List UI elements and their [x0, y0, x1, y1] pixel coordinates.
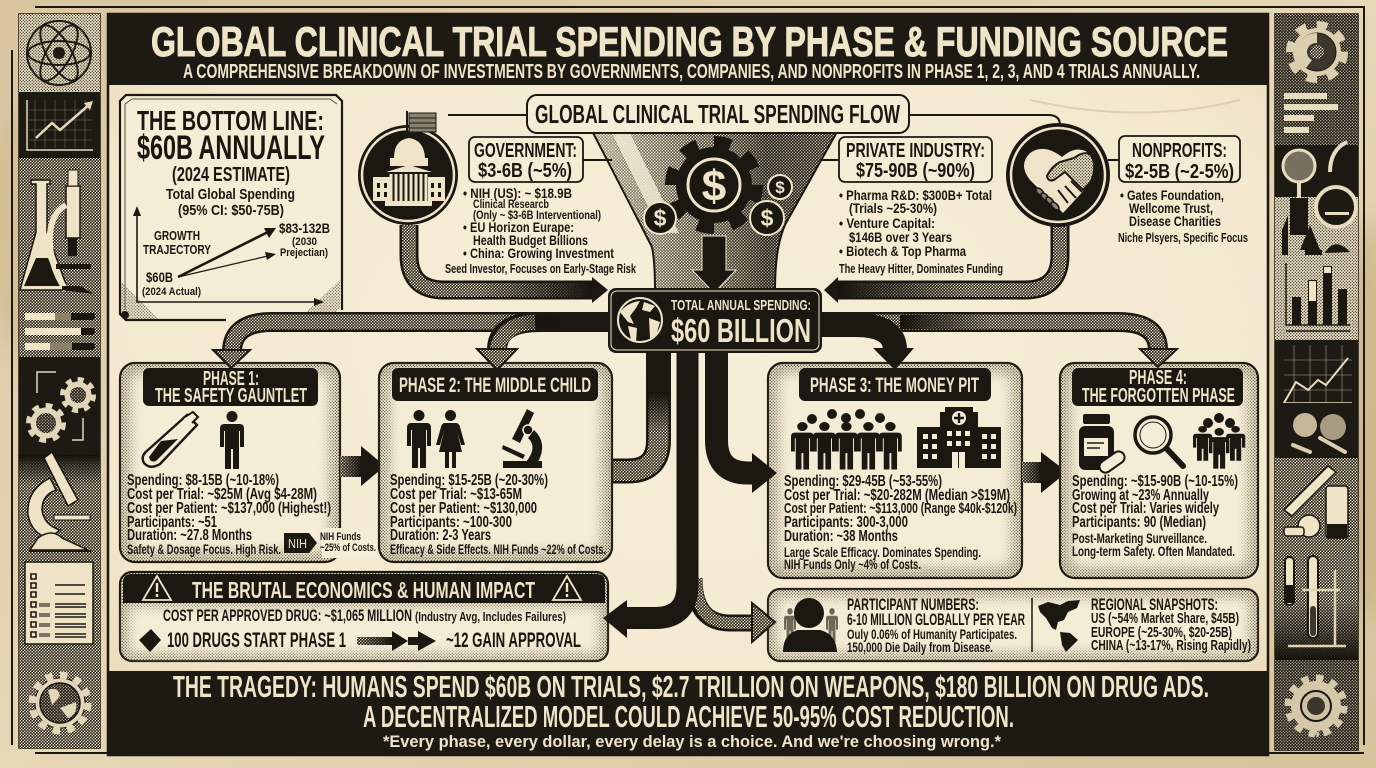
- NIH callout phase 1: ~25% of Costs.: [320, 542, 376, 554]
- icon: bottle and pills: [1275, 458, 1358, 543]
- panel: bottom line: (95% CI: $50-75B): [178, 202, 284, 219]
- heading: nonprofits: NONPROFITS:: [1132, 140, 1227, 162]
- text: phase 1 stats: Duration: ~27.8 Months: [127, 527, 252, 544]
- text: government details: Seed Investor, Focuses on Early-Stage Risk: [445, 262, 636, 276]
- heading: government: [469, 137, 583, 182]
- growth trajectory chart: (2030: [292, 236, 317, 248]
- growth trajectory chart: TRAJECTORY: [143, 242, 211, 257]
- icon: coins: [644, 175, 792, 235]
- arrow: phase 1 to 2: [340, 446, 385, 486]
- text: phase 3 stats: [784, 473, 1017, 572]
- panel: participants and regions: [768, 589, 1258, 661]
- text: phase 3 stats: Spending: $29-45B (~53-55%): [784, 473, 942, 490]
- total annual spending box: [608, 288, 822, 353]
- heading: government: $3-6B (~5%): [478, 160, 572, 182]
- growth trajectory chart: GROWTH: [154, 228, 200, 243]
- text: phase 4 stats: [1072, 473, 1238, 559]
- text: private industry details: (Trials ~25-30%): [849, 200, 937, 216]
- text: nonprofit details: Niche Plsyers, Specific Focus: [1118, 231, 1248, 245]
- phase 2 header: [392, 368, 598, 401]
- text: private industry details: The Heavy Hitter, Dominates Funding: [839, 262, 1003, 276]
- panel: brutal economics: [120, 572, 608, 661]
- icon: coins: $: [654, 205, 667, 231]
- text: government details: Clinical Researcb: [473, 199, 549, 211]
- text: regional snapshots: CHINA (~13-17%, Rising Rapidly): [1091, 637, 1251, 654]
- panel: phase 1: [120, 363, 340, 562]
- arrow: attrition: [357, 631, 436, 651]
- arrow: to phase 2: [477, 315, 610, 370]
- phase 4 header: PHASE 4:: [1129, 367, 1187, 389]
- bottom banner: *Every phase, every dollar, every delay is a choice. And we're choosing wrong.*: [383, 732, 1001, 751]
- source: nonprofits: [824, 123, 1248, 303]
- heading: private industry: $75-90B (~90%): [856, 160, 975, 182]
- text: phase 4 stats: Cost per Trial: Varies widely: [1072, 500, 1219, 517]
- icon: gear: [1275, 660, 1358, 750]
- total annual spending box: TOTAL ANNUAL SPENDING:: [671, 297, 811, 314]
- text: phase 3 stats: Duration: ~38 Months: [784, 528, 898, 545]
- icon: flask and syringe: [19, 158, 100, 294]
- text: phase 3 stats: Cost per Trial: ~$20-282M (Median >$19M): [784, 487, 1010, 504]
- text: phase 2 stats: [390, 472, 606, 557]
- icon: americas map: [1038, 600, 1080, 652]
- text: participant numbers: 6-10 MILLION GLOBALLY PER YEAR: [847, 610, 1025, 629]
- icon: line chart: [1275, 340, 1358, 403]
- icon: pill bottle: [1079, 414, 1127, 475]
- arrow: to phase 1: [213, 322, 610, 368]
- NIH callout phase 1: NIH Funds: [320, 531, 361, 543]
- icon: hospital: [917, 407, 1001, 468]
- icon: pie gear: [1275, 14, 1358, 145]
- text: phase 1 stats: Spending: $8-15B (~10-18%): [127, 472, 279, 489]
- text: participant numbers: PARTICIPANT NUMBERS:: [847, 595, 979, 614]
- phase 4 header: THE FORGOTTEN PHASE: [1082, 385, 1235, 407]
- icon: globe: [618, 298, 662, 342]
- text: phase 2 stats: Duration: 2-3 Years: [390, 527, 491, 544]
- text: participant numbers: [847, 595, 1025, 655]
- text: phase 4 stats: Long-term Safety. Often Mandated.: [1072, 543, 1235, 559]
- icon: globe gear: [19, 652, 100, 748]
- heading: private industry: PRIVATE INDUSTRY:: [846, 140, 985, 162]
- text: nonprofit details: Wellcome Trust,: [1129, 200, 1213, 216]
- phase 1 header: [143, 368, 318, 407]
- icon: worn magnifiers: [1275, 403, 1358, 458]
- text: government details: • NIH (US): ~ $18.9B: [463, 185, 572, 201]
- connector lines to flow title: [448, 115, 1060, 125]
- text: nonprofit details: • Gates Foundation,: [1120, 187, 1224, 203]
- text: government details: (Only ~ $3-6B Interventional): [473, 210, 601, 222]
- icon: group: [1193, 413, 1245, 469]
- icon: gears: [19, 357, 100, 455]
- icon: test tube on stand: [1275, 543, 1358, 660]
- bottom banner: [108, 669, 1268, 755]
- phase 2 header: PHASE 2: THE MIDDLE CHILD: [399, 374, 591, 397]
- heading: nonprofits: [1119, 136, 1240, 183]
- text: phase 1 stats: Participants: ~51: [127, 514, 217, 531]
- text: private industry details: • Pharma R&D: $300B+ Total: [839, 187, 992, 203]
- panel: bottom line: Total Global Spending: [166, 186, 295, 203]
- arrow: to phase 4: [822, 315, 1177, 367]
- panel: bottom line: [120, 95, 342, 320]
- text: phase 2 stats: Participants: ~100-300: [390, 514, 512, 531]
- arrow: stem to participants: [694, 578, 775, 642]
- text: phase 4 stats: Participants: 90 (Median): [1072, 514, 1206, 531]
- icon: microscope: [19, 452, 100, 560]
- text: phase 3 stats: Large Scale Efficacy. Dominates Spending.: [784, 544, 981, 560]
- panel: bottom line: THE BOTTOM LINE:: [137, 105, 324, 136]
- text: regional snapshots: US (~54% Market Share, $45B): [1091, 610, 1239, 627]
- text: phase 3 stats: Participants: 300-3,000: [784, 514, 908, 531]
- text: phase 3 stats: NIH Funds Only ~4% of Costs.: [784, 556, 921, 572]
- text: phase 4 stats: Post-Marketing Surveillance.: [1072, 530, 1207, 546]
- total annual spending box: $60 BILLION: [671, 312, 811, 349]
- right icon sidebar: [1275, 14, 1358, 750]
- text: participant numbers: 150,000 Die Daily from Disease.: [847, 639, 993, 655]
- panel: brutal economics: COST PER APPROVED DRUG: ~$1,065 MILLION: [163, 606, 412, 625]
- arrow: stem to brutal economics: [603, 350, 688, 638]
- icon: coins: $: [761, 205, 774, 231]
- arrow: government pipe: [409, 225, 608, 303]
- icon: crowd: [791, 409, 902, 470]
- text: phase 1 stats: Cost per Trial: ~$25M (Avg $4-28M): [127, 486, 317, 503]
- text: phase 4 stats: Spending: ~$15-90B (~10-15%): [1072, 473, 1238, 490]
- icon: bar chart: [1275, 262, 1358, 340]
- arrow: phase 3 to 4: [1022, 452, 1067, 493]
- panel: bottom line: (2024 ESTIMATE): [172, 164, 290, 186]
- text: government details: [445, 185, 636, 276]
- icon: warning triangles: [143, 576, 581, 600]
- text: private industry details: • Biotech & Top Pharma: [839, 243, 966, 259]
- icon: checklist: [19, 558, 100, 652]
- brutal economics header: [123, 574, 605, 603]
- growth trajectory chart: $83-132B: [279, 220, 330, 236]
- growth trajectory chart: (2024 Actual): [142, 286, 201, 298]
- flow title: [527, 95, 909, 133]
- panel: phase 3: [768, 363, 1022, 578]
- panel: brutal economics: (Industry Avg, Includes Failures): [415, 609, 566, 624]
- phase 3 header: PHASE 3: THE MONEY PIT: [810, 374, 979, 397]
- panel: phase 2: [379, 363, 612, 562]
- phase 4 header: [1072, 367, 1243, 407]
- source: government: [358, 111, 636, 303]
- source: private industry: [839, 137, 1003, 276]
- panel: brutal economics: ~12 GAIN APPROVAL: [446, 629, 581, 652]
- phase 1 header: THE SAFETY GAUNTLET: [155, 385, 307, 407]
- NIH callout phase 1: NIH: [288, 537, 307, 551]
- text: phase 3 stats: Cost per Patient: ~$113,000 (Range $40k-$120k): [784, 500, 1017, 517]
- panel: brutal economics: 100 DRUGS START PHASE 1: [167, 629, 346, 652]
- icon: microscope: [502, 409, 542, 468]
- left icon sidebar: [19, 14, 100, 748]
- text: nonprofit details: Disease Charities: [1129, 213, 1221, 229]
- text: government details: • China: Growing Investment: [463, 245, 614, 261]
- text: private industry details: $146B over 3 Years: [849, 229, 952, 245]
- text: phase 2 stats: Cost per Patient: ~$130,000: [390, 500, 537, 517]
- text: participant numbers: Ouly 0.06% of Humanity Participates.: [847, 626, 1017, 642]
- arrow: nonprofit pipe: [824, 225, 1060, 303]
- funnel: [588, 123, 842, 290]
- heading: nonprofits: $2-5B (~2-5%): [1125, 161, 1234, 183]
- text: regional snapshots: REGIONAL SNAPSHOTS:: [1091, 595, 1218, 614]
- icon: participant silhouettes: [783, 598, 838, 652]
- icon: magnifier: [1135, 417, 1183, 466]
- text: government details: Health Budget Billions: [473, 232, 588, 248]
- NIH callout phase 1: [284, 528, 378, 558]
- icon: man and woman: [407, 410, 465, 468]
- text: phase 2 stats: Cost per Trial: ~$13-65M: [390, 486, 522, 503]
- text: government details: • EU Horizon Eurape:: [463, 219, 574, 235]
- icon: heart handshake: [1006, 123, 1110, 227]
- arrow: stem to phase 3: [716, 350, 777, 493]
- growth trajectory chart: Prejectian): [280, 247, 328, 259]
- text: private industry details: • Venture Capital:: [839, 215, 935, 231]
- icon: test tube: [143, 412, 198, 467]
- arrow: to phase 3: [820, 325, 914, 370]
- icon: magnifier and flask: [1275, 142, 1358, 262]
- icon: progress bars: [19, 294, 100, 357]
- icon: person: [220, 411, 244, 469]
- icon: capitol: [358, 111, 458, 225]
- icon: dollar gear: $: [702, 162, 726, 211]
- icon: atom: [19, 14, 100, 92]
- text: phase 2 stats: Spending: $15-25B (~20-30%): [390, 472, 548, 489]
- panel: bottom line: $60B ANNUALLY: [137, 129, 325, 167]
- text: phase 4 stats: Growing at ~23% Annually: [1072, 487, 1209, 504]
- phase 3 header: [799, 368, 991, 401]
- text: phase 1 stats: Cost per Patient: ~$137,000 (Highest!): [127, 500, 331, 517]
- flow title: GLOBAL CLINICAL TRIAL SPENDING FLOW: [535, 99, 900, 129]
- text: nonprofit details: [1118, 187, 1248, 245]
- text: private industry details: [839, 187, 1003, 276]
- icon: coins: $: [775, 178, 785, 197]
- text: phase 1 stats: Safety & Dosage Focus. High Risk.: [127, 541, 281, 557]
- text: phase 1 stats: [127, 472, 331, 557]
- text: regional snapshots: EUROPE (~25-30%, $20-25B): [1091, 624, 1232, 641]
- title banner: [108, 14, 1268, 85]
- text: phase 2 stats: Efficacy & Side Effects. NIH Funds ~22% of Costs.: [390, 541, 606, 557]
- text: regional snapshots: [1091, 595, 1251, 654]
- icon: dollar gear: [644, 142, 792, 235]
- growth trajectory chart: [133, 206, 330, 306]
- icon: growth chart: [19, 92, 100, 158]
- phase 1 header: PHASE 1:: [203, 368, 259, 390]
- icon: pill: [139, 629, 161, 652]
- brutal economics header: THE BRUTAL ECONOMICS & HUMAN IMPACT: [192, 577, 535, 603]
- heading: private industry: [839, 137, 992, 182]
- panel: phase 4: [1060, 363, 1258, 578]
- arrow: stem to phase 2: [613, 350, 669, 471]
- arrow: funnel down: [692, 236, 736, 293]
- heading: government: GOVERNMENT:: [474, 140, 577, 162]
- growth trajectory chart: $60B: [146, 269, 173, 285]
